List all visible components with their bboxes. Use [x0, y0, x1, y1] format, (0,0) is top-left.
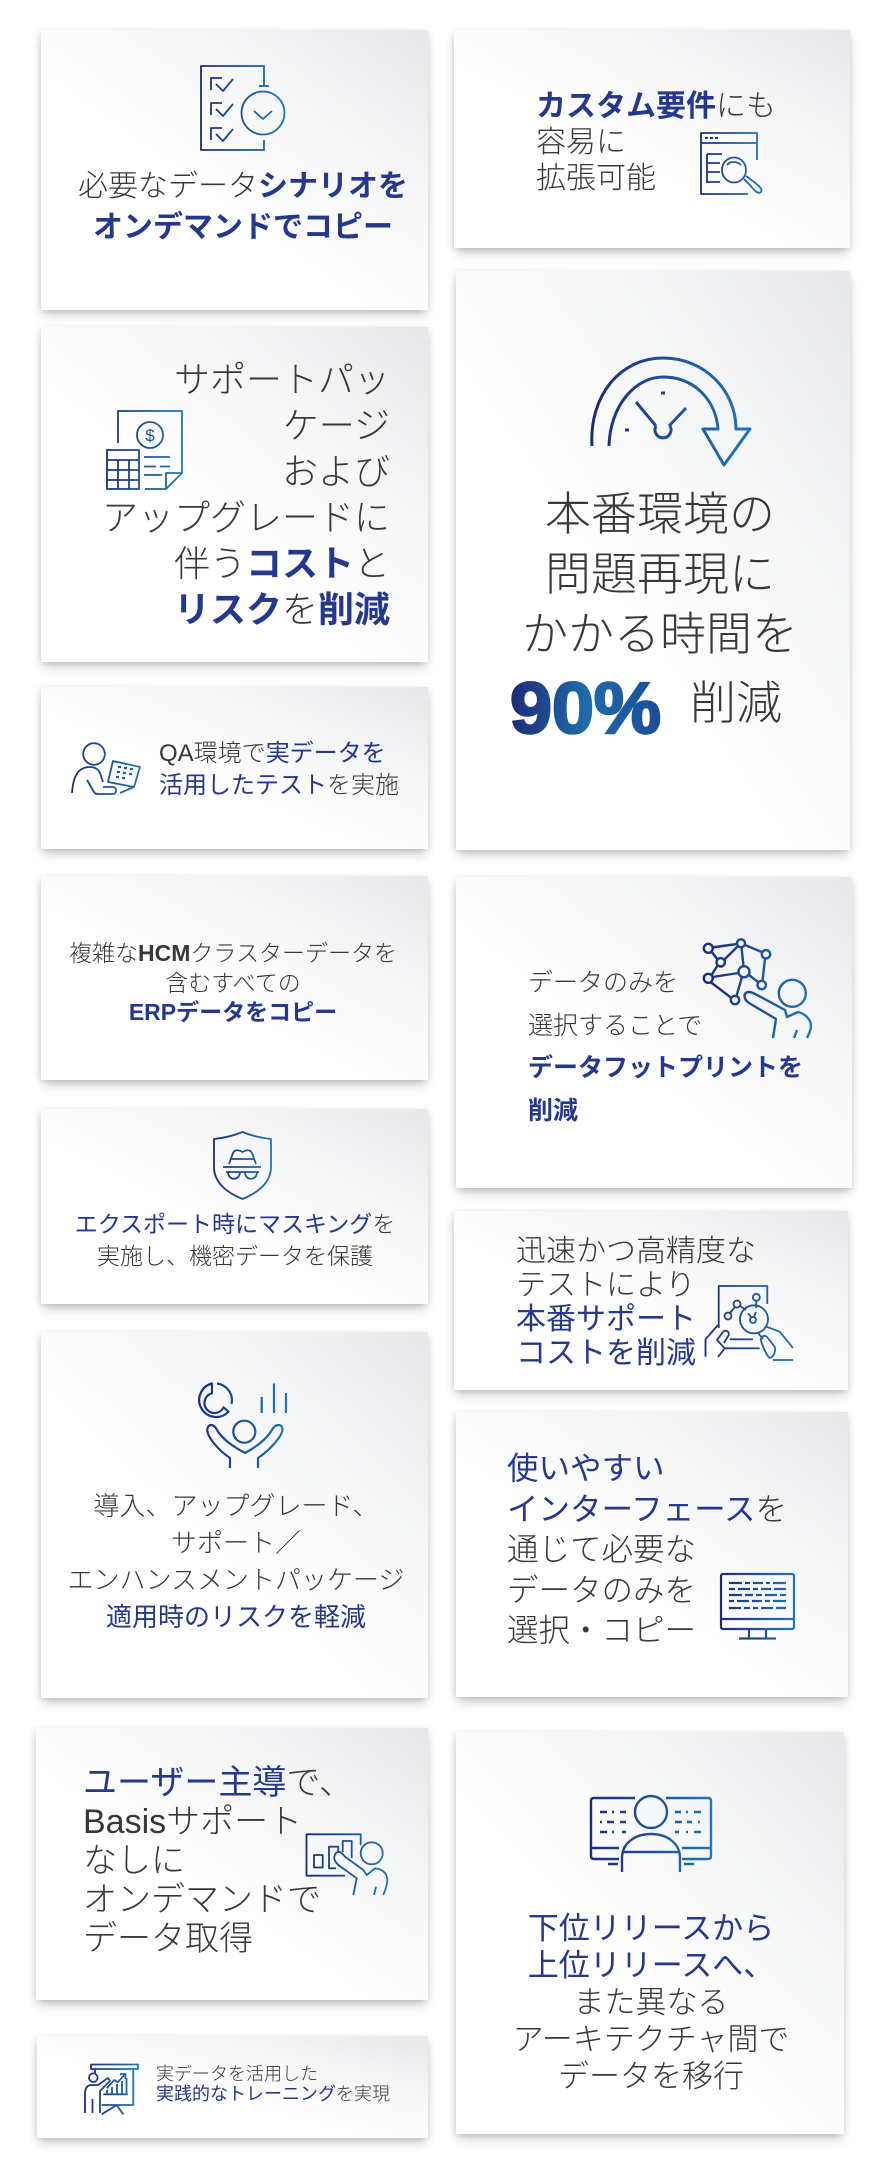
body text: 伴うコストと	[174, 542, 390, 584]
body text: アーキテクチャ間で	[513, 2022, 789, 2057]
stat: 90%: 90%	[510, 669, 661, 749]
icon: checklist with stopwatch	[200, 65, 286, 151]
body text: データ取得	[83, 1920, 253, 1958]
body text	[536, 90, 776, 195]
body text: コストを削減	[516, 1337, 696, 1370]
body text: なしに	[83, 1842, 185, 1880]
panel: QA testing with real data	[41, 687, 428, 849]
body text: 本番サポート	[516, 1303, 696, 1336]
body text: ユーザー主導で、	[83, 1764, 353, 1802]
body text	[159, 740, 399, 799]
body text	[156, 2064, 390, 2104]
body text: 含むすべての	[165, 970, 301, 996]
body text: および	[282, 450, 390, 492]
body text: 選択することで	[528, 1012, 702, 1040]
icon: shield with masked face	[213, 1131, 272, 1200]
body text	[102, 358, 390, 630]
body text: 実践的なトレーニングを実現	[156, 2084, 390, 2104]
body text: 通じて必要な	[507, 1531, 696, 1567]
body text: カスタム要件にも	[536, 90, 776, 123]
body text: 上位リリースへ、	[528, 1948, 774, 1983]
icon: tablet with magnifier and hands	[704, 1285, 794, 1361]
icon: person presenting chart	[306, 1833, 388, 1896]
body text: また異なる	[574, 1985, 728, 2020]
body text: インターフェースを	[507, 1490, 787, 1526]
body text: 拡張可能	[536, 162, 656, 195]
body text: データを移行	[558, 2059, 744, 2094]
headline text: 本番環境の	[545, 488, 775, 540]
panel: easy to use interface	[456, 1412, 848, 1697]
panel: 90 percent time reduction	[456, 271, 850, 850]
icon: monitor with code	[720, 1572, 796, 1640]
body text: オンデマンドで	[83, 1881, 321, 1919]
body text: データのみを	[507, 1572, 696, 1608]
body text: 削減	[528, 1096, 578, 1124]
body text: 迅速かつ高精度な	[516, 1235, 756, 1268]
body text: 実施し、機密データを保護	[97, 1242, 373, 1268]
icon: invoice with calculator: $	[145, 426, 155, 445]
body text	[528, 969, 803, 1124]
panel: reduce support package cost	[41, 327, 428, 662]
body text: 選択・コピー	[507, 1612, 696, 1648]
body text: データのみを	[528, 969, 678, 997]
body text	[516, 1235, 756, 1370]
body text: Basisサポート	[83, 1803, 302, 1841]
headline text: かかる時間を	[522, 608, 798, 660]
body text: エンハンスメントパッケージ	[68, 1565, 404, 1595]
body text: 活用したテストを実施	[159, 772, 399, 799]
panel: on-demand scenario copy	[41, 30, 428, 310]
panel: ERP data copy	[41, 876, 428, 1080]
stat label: 削減	[690, 677, 782, 729]
body text	[83, 1764, 353, 1958]
icon: trainer at board	[84, 2064, 139, 2116]
body text: QA環境で実データを	[159, 740, 386, 767]
panel: fast testing reduces support cost	[454, 1211, 848, 1390]
heading text	[78, 170, 408, 244]
body text: 導入、アップグレード、	[94, 1491, 378, 1521]
body text: 下位リリースから	[528, 1911, 774, 1946]
icon: invoice with calculator	[106, 410, 183, 490]
body text	[75, 1211, 395, 1268]
panel: easily extended for custom requirements	[454, 30, 850, 248]
body text	[513, 1911, 789, 2094]
body text	[69, 940, 397, 1025]
headline text	[522, 488, 798, 660]
body text: 複雑なHCMクラスターデータを	[69, 940, 397, 966]
heading text: オンデマンドでコピー	[93, 211, 393, 244]
body text	[507, 1450, 787, 1648]
body text: データフットプリントを	[528, 1054, 803, 1082]
panel: practical training	[37, 2036, 428, 2138]
body text: 適用時のリスクを軽減	[106, 1602, 366, 1632]
body text: サポート／	[171, 1528, 301, 1558]
panel: reduce data footprint	[456, 877, 852, 1188]
body text: サポートパッ	[174, 358, 390, 400]
heading text: 必要なデータシナリオを	[78, 170, 408, 203]
body text: アップグレードに	[102, 496, 390, 538]
body text: 容易に	[536, 126, 626, 159]
icon: person with charts	[198, 1382, 288, 1468]
panel: user-driven on-demand data	[36, 1728, 428, 2000]
panel: reduce deployment risk	[41, 1332, 428, 1698]
panel: migrate between releases	[456, 1732, 844, 2134]
body text: ケージ	[283, 404, 390, 446]
icon: person at laptop	[71, 742, 141, 795]
body text: テストにより	[516, 1269, 695, 1302]
body text: リスクを削減	[174, 588, 390, 630]
body text: 使いやすい	[507, 1450, 665, 1486]
icon: person touching network	[702, 938, 812, 1038]
body text: 実データを活用した	[156, 2064, 318, 2084]
panel: masking on export	[41, 1109, 428, 1304]
body text: エクスポート時にマスキングを	[75, 1211, 395, 1237]
headline text: 問題再現に	[545, 548, 775, 600]
icon: clock with circular arrow	[590, 356, 752, 467]
body text: ERPデータをコピー	[129, 999, 337, 1025]
icon: person in front of monitor	[590, 1794, 712, 1872]
body text	[68, 1491, 404, 1632]
icon: window with magnifier	[700, 132, 762, 195]
